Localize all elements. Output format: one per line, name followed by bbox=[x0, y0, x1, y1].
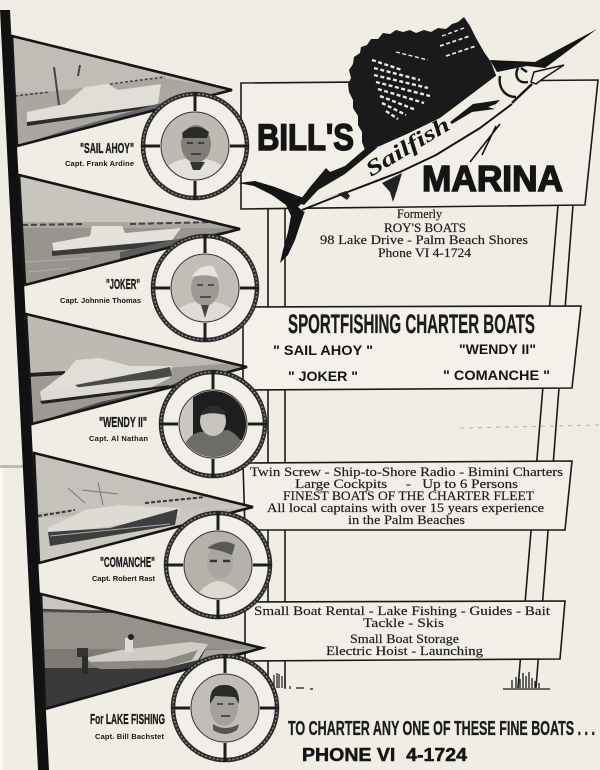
address block bbox=[320, 206, 528, 260]
sailfish script: Sailfish bbox=[361, 111, 454, 181]
boat name: joker: " JOKER " bbox=[288, 368, 358, 384]
fish second dorsal bbox=[320, 191, 350, 200]
formerly: Formerly bbox=[397, 206, 442, 221]
flag pole bbox=[0, 10, 49, 770]
roy's boats: ROY'S BOATS bbox=[384, 220, 466, 235]
boat label: joker bbox=[60, 276, 141, 305]
fish pectoral fin bbox=[450, 100, 500, 124]
pennant 5: lake fishing photo bbox=[40, 592, 267, 710]
pennant 1: sail ahoy photo bbox=[11, 34, 232, 148]
captain name: Capt. Johnnie Thomas bbox=[60, 296, 141, 305]
pennant 4: comanche photo bbox=[32, 451, 254, 564]
icon: sailfish illustration bbox=[238, 17, 597, 263]
panel: sportfishing charter boats bbox=[243, 306, 581, 390]
business name: bill's: BILL'S bbox=[257, 117, 354, 158]
services line 4: Electric Hoist - Launching bbox=[326, 643, 484, 658]
captain name: Capt. Frank Ardine bbox=[65, 159, 134, 168]
grass at right post bbox=[503, 672, 550, 689]
boat label: sail ahoy: "SAIL AHOY" bbox=[80, 140, 134, 157]
services line 2: Tackle - Skis bbox=[363, 615, 444, 630]
portrait ring 2: captain johnnie thomas bbox=[151, 234, 259, 342]
pennant 2: joker photo bbox=[18, 174, 240, 286]
fish pelvic fins bbox=[470, 124, 500, 162]
boat label: wendy II: "WENDY II" bbox=[99, 414, 147, 431]
features line 2: Large Cockpits - Up to 6 Persons bbox=[295, 476, 518, 491]
portrait ring 1: captain frank ardine bbox=[141, 92, 249, 200]
panel: features bbox=[243, 461, 572, 530]
boat name: comanche: " COMANCHE " bbox=[443, 367, 550, 383]
boat label: lake fishing: For LAKE FISHING bbox=[90, 711, 165, 728]
fish anal fin bbox=[382, 173, 402, 202]
fish tail and lower fins bbox=[238, 181, 312, 263]
captain name: Capt. Al Nathan bbox=[89, 434, 148, 443]
features line 1: Twin Screw - Ship-to-Shore Radio - Bimini Charters bbox=[250, 464, 563, 479]
panel: small boat services bbox=[245, 601, 565, 661]
fish upper bill bbox=[490, 29, 597, 72]
phone: Phone VI 4-1724 bbox=[378, 245, 472, 260]
features line 3: FINEST BOATS OF THE CHARTER FLEET bbox=[283, 488, 534, 503]
services line 3: Small Boat Storage bbox=[350, 631, 459, 646]
boat label: comanche bbox=[92, 554, 156, 583]
fish head markings bbox=[500, 68, 532, 103]
boat label: wendy II bbox=[89, 414, 148, 443]
fish sail bbox=[348, 17, 497, 150]
boat label: joker: "JOKER" bbox=[106, 276, 140, 293]
sign board posts bbox=[268, 205, 573, 688]
boat name: wendy II: "WENDY II" bbox=[459, 341, 536, 357]
portrait ring 5: captain bill bachstet bbox=[171, 654, 279, 762]
captain name: Capt. Bill Bachstet bbox=[95, 732, 164, 741]
features line 4: All local captains with over 15 years experience bbox=[267, 500, 544, 515]
panel: marina name sign bbox=[241, 80, 598, 209]
fish belly line bbox=[302, 104, 512, 210]
fish sail speckles bbox=[372, 28, 476, 119]
boat label: lake fishing bbox=[90, 711, 165, 741]
services line 1: Small Boat Rental - Lake Fishing - Guides - Bait bbox=[254, 603, 550, 618]
grass at left post bbox=[274, 673, 313, 689]
phone number: PHONE VI 4-1724 bbox=[302, 745, 467, 765]
street address: 98 Lake Drive - Palm Beach Shores bbox=[320, 232, 528, 247]
captain name: Capt. Robert Rast bbox=[92, 574, 156, 583]
boat label: comanche: "COMANCHE" bbox=[100, 554, 155, 571]
boat name: sail ahoy: " SAIL AHOY " bbox=[273, 342, 373, 358]
portrait ring 4: captain robert rast bbox=[164, 511, 272, 619]
fish body bbox=[298, 64, 540, 212]
fish back band and dorsal fin bbox=[298, 147, 378, 205]
paper fold marks bbox=[0, 425, 600, 770]
portrait ring 3: captain al nathan bbox=[159, 370, 267, 478]
fish lower jaw bbox=[531, 65, 564, 84]
pennant 3: wendy II photo bbox=[26, 312, 248, 426]
business name: marina: MARINA bbox=[422, 158, 563, 199]
features line 5: in the Palm Beaches bbox=[348, 512, 465, 527]
boat label: sail ahoy bbox=[65, 140, 134, 168]
